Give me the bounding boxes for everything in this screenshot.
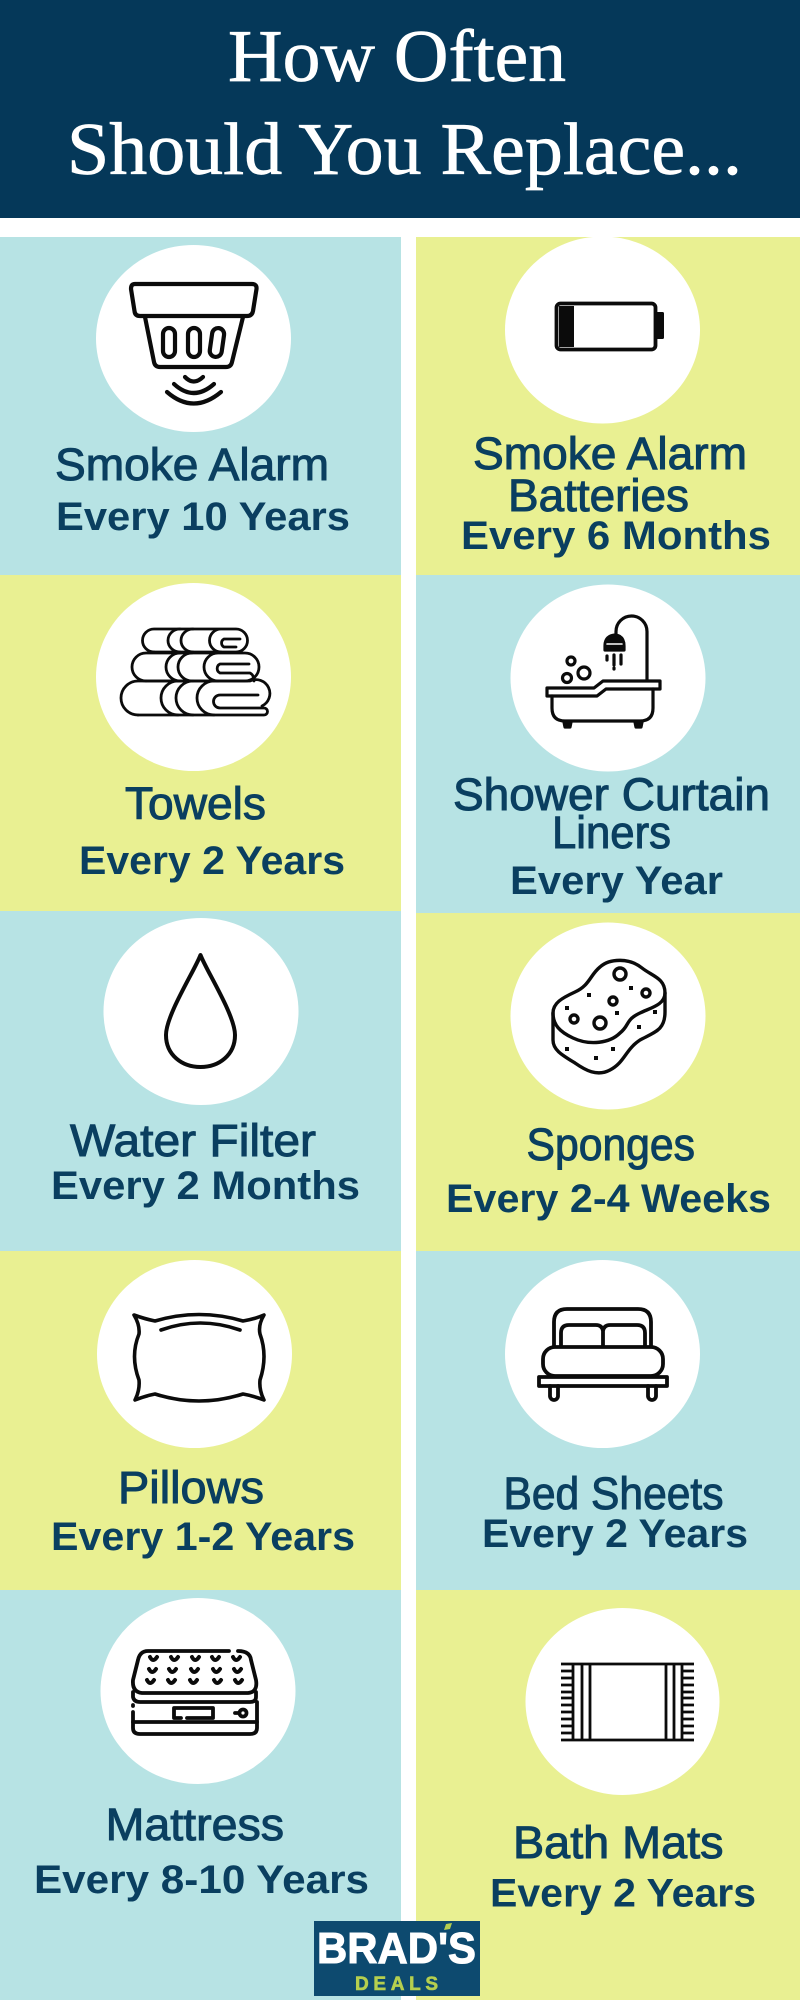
icon: pillow: [134, 1314, 264, 1401]
label: every 2 years: Every 2 Years: [482, 1512, 748, 1556]
icon: water drop: [166, 955, 235, 1067]
panel: towels: [0, 575, 401, 911]
label: smoke alarm: Smoke Alarm: [55, 439, 329, 490]
panel: shower curtain liners: [416, 575, 800, 913]
title: Should You Replace...: [67, 109, 742, 191]
icon: bathtub and shower: [547, 616, 660, 727]
label: batteries: Batteries: [508, 470, 689, 521]
label: mattress: Mattress: [106, 1799, 284, 1850]
title: How Often: [228, 16, 566, 98]
label: smoke alarm batteries: Smoke Alarm: [473, 428, 747, 479]
label: every year: Every Year: [510, 859, 723, 903]
panel: water filter: [0, 911, 401, 1251]
logo: Brad's Deals: [314, 1921, 480, 1996]
label: pillows: Pillows: [118, 1462, 264, 1513]
icon: smoke alarm: [131, 284, 257, 404]
label: every 6 months: Every 6 Months: [461, 514, 771, 558]
icon: towels: [121, 629, 270, 715]
label: shower curtain: Shower Curtain: [453, 769, 770, 820]
label: sponges: Sponges: [526, 1119, 695, 1170]
label: bath mats: Bath Mats: [513, 1817, 724, 1868]
label: every 2 years: Every 2 Years: [79, 839, 345, 883]
panel: sponges: [416, 913, 800, 1251]
icon: sponge: [553, 960, 665, 1073]
label: liners: Liners: [552, 807, 671, 858]
label: every 2-4 weeks: Every 2-4 Weeks: [446, 1177, 771, 1221]
icon: battery: [556, 304, 664, 350]
label: towels: Towels: [125, 778, 266, 829]
icon: bath mat: [561, 1664, 694, 1740]
panel: mattress: [0, 1590, 401, 2000]
panel: bath mats: [416, 1590, 800, 2000]
logo: Brad's Deals: DEALS: [355, 1974, 438, 1995]
label: every 2 years: Every 2 Years: [490, 1872, 756, 1916]
panel: bed sheets: [416, 1251, 800, 1590]
icon: bed: [539, 1309, 667, 1400]
icon: mattress: [133, 1651, 257, 1734]
label: every 1-2 years: Every 1-2 Years: [51, 1515, 355, 1559]
logo: Brad's Deals: BRAD'S: [317, 1924, 476, 1973]
header banner: [0, 0, 800, 218]
panel: pillows: [0, 1251, 401, 1590]
label: water filter: Water Filter: [70, 1115, 316, 1166]
title: [67, 16, 742, 191]
label: bed sheets: Bed Sheets: [504, 1468, 724, 1519]
label: every 10 years: Every 10 Years: [56, 495, 350, 539]
panel: smoke alarm batteries: [416, 236, 800, 575]
panel: smoke alarm: [0, 237, 401, 575]
label: every 8-10 years: Every 8-10 Years: [34, 1858, 369, 1902]
label: every 2 months: Every 2 Months: [51, 1164, 360, 1208]
